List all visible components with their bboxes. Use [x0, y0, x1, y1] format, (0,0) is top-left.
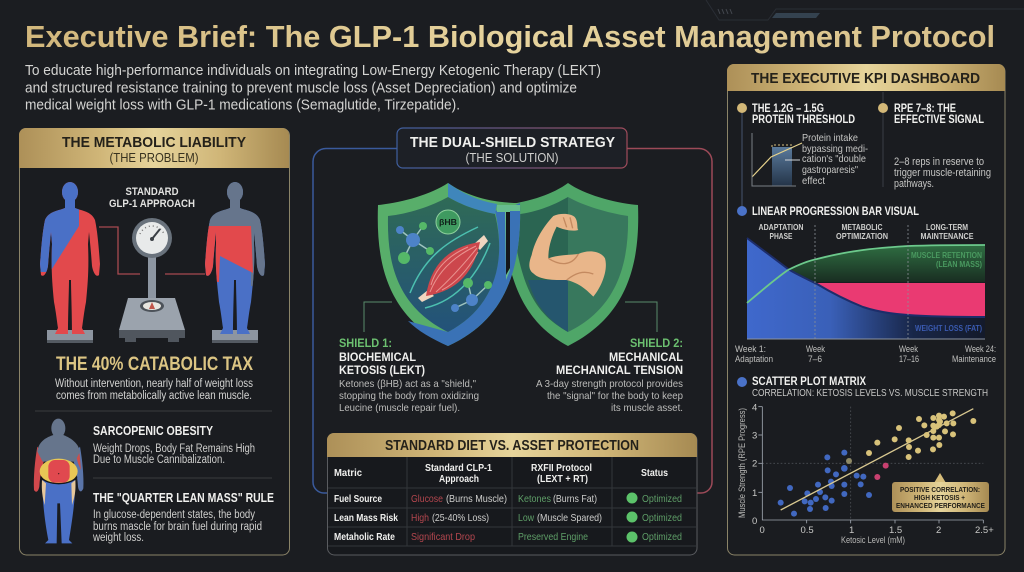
table row: lean mass risk: (25-40% Loss): [432, 512, 489, 524]
table header row: [334, 462, 668, 485]
week axis labels: Week 1:: [735, 344, 766, 354]
heading: 40% catabolic tax: THE 40% CATABOLIC TAX: [56, 354, 253, 375]
table header row: Status: [641, 467, 668, 479]
text: shield 2: MECHANICAL TENSION: [556, 363, 683, 377]
text: quarter lean mass rule: [92, 491, 274, 544]
table row: metabolic rate: [334, 531, 682, 543]
text: catabolic tax explanation: comes from metabolically active lean muscle.: [56, 390, 252, 402]
series labels: [911, 250, 982, 333]
table header row: RXFII Protocol: [531, 462, 592, 474]
week axis labels: [735, 344, 996, 364]
text: shield 1: Leucine (muscle repair fuel).: [339, 402, 460, 414]
table row: metabolic rate: Preserved Engine: [518, 531, 588, 543]
week axis labels: Week 24:: [965, 344, 996, 354]
table row: fuel source: Optimized: [642, 493, 682, 505]
text: sarcopenic obesity: Weight Drops, Body Fat Remains High: [93, 443, 255, 455]
panel frame lines: [313, 148, 712, 493]
week axis labels: Adaptation: [735, 354, 773, 364]
axis tick labels: [752, 402, 994, 536]
week axis labels: 17–16: [899, 354, 919, 364]
KPI: protein threshold: [737, 101, 868, 187]
text: shield 1: [339, 336, 479, 414]
week axis labels: Week: [899, 344, 918, 354]
table row: fuel source: (Burns Muscle): [446, 493, 507, 505]
table row: metabolic rate: Significant Drop: [411, 531, 475, 543]
table row: lean mass risk: (Muscle Spared): [537, 512, 602, 524]
table row: fuel source: [334, 492, 682, 505]
area: pink gap: [817, 283, 985, 317]
KPI: protein threshold: bypassing medi-: [802, 143, 868, 155]
axis titles: Ketosic Level (mM): [841, 535, 905, 546]
text: shield 2: the "signal" for the body to keep: [547, 390, 683, 402]
heading: dual-shield strategy: [397, 128, 627, 168]
intro text: medical weight loss with GLP-1 medications (Semaglutide, Tirzepatide).: [25, 96, 460, 114]
text: shield 2: [536, 336, 683, 414]
phase labels: PHASE: [770, 231, 793, 241]
table row: lean mass risk: Low: [518, 512, 534, 524]
KPI: protein threshold: cation's "double: [802, 153, 866, 165]
phase labels: METABOLIC: [842, 222, 882, 232]
axis tick labels: 0: [760, 525, 765, 536]
table row: fuel source: (Burns Fat): [553, 493, 597, 505]
accent data points: [846, 458, 889, 480]
text: quarter lean mass rule: THE "QUARTER LEAN MASS" RULE: [93, 491, 274, 505]
text: quarter lean mass rule: weight loss.: [92, 532, 144, 544]
table header row: Standard CLP-1: [425, 462, 492, 474]
mini protein chart: [752, 133, 802, 186]
text: shield 2: MECHANICAL: [609, 350, 683, 364]
table header row: Matric: [334, 467, 362, 479]
table row: lean mass risk: High: [411, 512, 429, 524]
text: shield 1: BIOCHEMICAL: [339, 350, 416, 364]
table: standard diet vs asset protection: [327, 433, 697, 555]
series labels: MUSCLE RETENTION: [911, 250, 982, 260]
connector lines to shields: [364, 302, 657, 332]
axis tick labels: 2: [752, 458, 757, 470]
panel: the metabolic liability: [19, 128, 290, 555]
week axis labels: Week: [806, 344, 825, 354]
callout: positive correlation: HIGH KETOSIS +: [914, 493, 966, 502]
panel header: KPI dashboard: THE EXECUTIVE KPI DASHBOARD: [751, 70, 980, 87]
table row: fuel source: Fuel Source: [334, 493, 382, 505]
table row: fuel source: Ketones: [518, 493, 551, 505]
label: standard GLP-1 approach: STANDARD: [126, 186, 179, 198]
KPI: RPE 7-8: 2–8 reps in reserve to: [894, 156, 984, 168]
text: sarcopenic obesity: Due to Muscle Cannibalization.: [93, 454, 225, 466]
table header row: (LEXT + RT): [537, 473, 588, 485]
intro text: To educate high-performance individuals on integrating Low-Energy Ketogenic Therapy (LEKT): [25, 62, 601, 79]
phase labels: ADAPTATION: [758, 222, 804, 232]
KPI: protein threshold: effect: [802, 175, 825, 187]
connector lines: [99, 227, 205, 274]
KPI: protein threshold: gastroparesis": [802, 164, 858, 176]
molecule top: [396, 222, 434, 264]
chart: scatter plot: [737, 402, 994, 546]
heading: dual-shield strategy: (THE SOLUTION): [466, 150, 558, 165]
KPI: RPE 7-8: trigger muscle-retaining: [894, 167, 991, 179]
text: catabolic tax explanation: Without intervention, nearly half of weight loss: [55, 378, 253, 390]
callout: positive correlation: [892, 473, 989, 512]
axis titles: [737, 408, 905, 546]
callout: positive correlation: ENHANCED PERFORMANCE: [896, 501, 985, 510]
KPI: protein threshold: Protein intake: [802, 132, 858, 144]
axis tick labels: 1: [752, 488, 757, 499]
text: shield 1: SHIELD 1:: [339, 336, 392, 350]
table header row: Approach: [439, 473, 479, 485]
icon: bHB circle: βHB: [439, 218, 457, 227]
axis tick labels: 0: [752, 516, 757, 527]
table row: lean mass risk: [334, 512, 682, 524]
table row: fuel source: Glucose: [411, 493, 443, 505]
figure: body composition before: [40, 182, 100, 343]
area: green muscle retention: [788, 245, 985, 284]
axis tick labels: 2: [936, 525, 941, 536]
label: standard GLP-1 approach: [109, 186, 195, 210]
series labels: WEIGHT LOSS (FAT): [915, 323, 982, 333]
panel header: KPI dashboard: [727, 64, 1005, 91]
series labels: (LEAN MASS): [936, 259, 982, 269]
week axis labels: Maintenance: [952, 354, 996, 364]
intro text: [25, 62, 601, 114]
panel header: metabolic liability: (THE PROBLEM): [110, 150, 198, 165]
panel header: metabolic liability: THE METABOLIC LIABILITY: [62, 134, 246, 151]
panel: the dual-shield strategy: [313, 128, 712, 555]
KPI: protein threshold: THE 1.2G – 1.5G: [752, 101, 824, 115]
gold data points: [866, 410, 976, 460]
figure: body composition after: [205, 182, 265, 343]
axis tick labels: 4: [752, 402, 757, 414]
intro text: and structured resistance training to prevent muscle loss (Asset Depreciation) and optimize: [25, 80, 577, 96]
text: shield 1: KETOSIS (LEKT): [339, 363, 425, 377]
table row: metabolic rate: Optimized: [642, 531, 682, 543]
molecule bottom: [451, 278, 492, 312]
text: shield 1: stopping the body from oxidizing: [339, 390, 479, 402]
KPI: RPE 7-8: RPE 7–8: THE: [894, 101, 956, 115]
muscle: [418, 235, 488, 302]
panel header: metabolic liability: [19, 128, 289, 168]
panel: executive KPI dashboard: [727, 64, 1005, 555]
KPI: RPE 7-8: pathways.: [894, 178, 934, 190]
blue data points: [778, 450, 872, 517]
axis tick labels: 1: [849, 525, 854, 536]
axis tick labels: 3: [752, 430, 757, 442]
table row: lean mass risk: Lean Mass Risk: [334, 512, 398, 524]
phase labels: [758, 222, 974, 241]
text: shield 2: its muscle asset.: [611, 402, 683, 414]
icon: bHB circle: [436, 210, 460, 234]
heading: linear progression: LINEAR PROGRESSION BAR VISUAL: [752, 204, 919, 218]
heading: dual-shield strategy: THE DUAL-SHIELD STRATEGY: [410, 134, 615, 151]
chart: linear progression: [735, 222, 996, 364]
text: quarter lean mass rule: burns mascle for brain fuel during rapid: [93, 521, 262, 533]
top-right tech decoration: [706, 0, 1024, 20]
text: shield 1: Ketones (βHB) act as a "shield,": [339, 378, 476, 390]
text: sarcopenic obesity: SARCOPENIC OBESITY: [93, 424, 214, 438]
KPI: RPE 7-8: EFFECTIVE SIGNAL: [894, 112, 984, 126]
table row: metabolic rate: Metaholic Rate: [334, 531, 395, 543]
phase labels: LONG-TERM: [926, 222, 968, 232]
text: catabolic tax explanation: [55, 378, 253, 402]
text: shield 2: SHIELD 2:: [630, 336, 683, 350]
heading: scatter plot matrix: [737, 374, 988, 399]
callout: positive correlation: POSITIVE CORRELATION:: [900, 485, 980, 494]
text: sarcopenic obesity: [93, 424, 255, 466]
title: Executive Brief: The GLP-1 Biological Asset Management Protocol: [25, 19, 995, 54]
icon: shield 2 flexed arm: [502, 183, 638, 346]
KPI: RPE 7-8: [878, 101, 991, 190]
axis titles: Muscle Strength (RPE Progress): [737, 408, 748, 518]
table row: lean mass risk: Optimized: [642, 512, 682, 524]
figure: sarcopenic obesity: [34, 419, 83, 543]
axis tick labels: 1.5: [889, 525, 902, 536]
axis tick labels: 2.5+: [975, 525, 994, 536]
KPI: protein threshold: PROTEIN THRESHOLD: [752, 112, 855, 126]
heading: scatter plot matrix: SCATTER PLOT MATRIX: [752, 374, 866, 388]
text: shield 2: A 3-day strength protocol provides: [536, 378, 683, 390]
axis tick labels: 0.5: [800, 525, 814, 536]
phase labels: OPTIMIZATION: [836, 231, 888, 241]
week axis labels: 7–6: [808, 354, 822, 364]
text: quarter lean mass rule: In glucose-dependent states, the body: [93, 509, 255, 521]
icon: weighing scale: [119, 218, 185, 342]
icon: shield 1 ketones and muscle: [378, 183, 520, 346]
label: standard GLP-1 approach: GLP-1 APPROACH: [109, 198, 195, 210]
table: standard diet vs asset protection: STANDARD DIET VS. ASSET PROTECTION: [385, 437, 639, 454]
phase labels: MAINTENANCE: [920, 231, 974, 241]
area: blue weight loss: [747, 238, 985, 339]
